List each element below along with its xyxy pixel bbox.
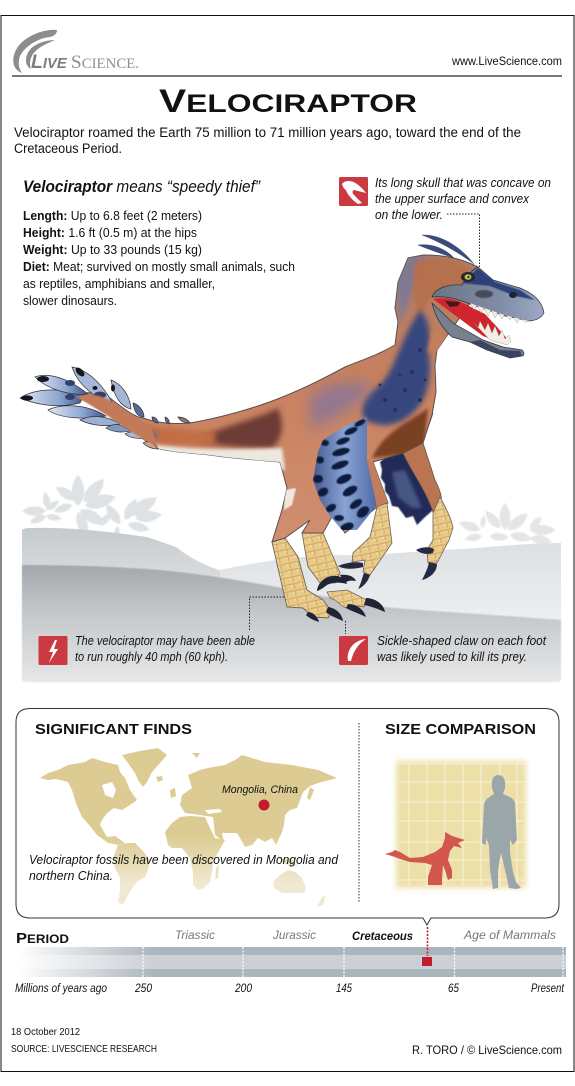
- hip highlight: [284, 488, 296, 510]
- fact list: Weight: Up to 33 pounds (15 kg): [23, 243, 202, 257]
- body shading: [120, 255, 472, 510]
- skull callout text: the upper surface and convex: [375, 192, 530, 206]
- fact list: Length: Up to 6.8 feet (2 meters): [23, 209, 202, 223]
- skull leader line: [447, 214, 480, 268]
- left bushes: [22, 475, 163, 541]
- eye: [461, 272, 475, 282]
- intro text: Cretaceous Period.: [14, 141, 122, 156]
- header rule: [12, 75, 562, 77]
- title: VELOCIRAPTOR: [159, 83, 417, 119]
- fact list: slower dinosaurs.: [23, 294, 117, 308]
- tail root: [76, 395, 158, 447]
- speed callout text: The velociraptor may have been able: [75, 634, 255, 648]
- far foot: [327, 590, 367, 608]
- velociraptor illustration: [20, 235, 544, 622]
- lower teeth: [473, 321, 511, 345]
- axis labels: 200: [234, 983, 253, 995]
- speed leader line: [250, 597, 284, 630]
- era labels: Jurassic: [272, 928, 316, 942]
- foot claws: [306, 575, 385, 622]
- logo wordmark: LIVE SCIENCE.: [31, 52, 139, 73]
- icon: claw: [339, 636, 368, 665]
- period timeline: [15, 927, 566, 995]
- neck and shoulder blue: [362, 310, 430, 425]
- skull shading: [462, 268, 535, 300]
- far wing: [380, 448, 433, 525]
- tail underside: [150, 444, 285, 470]
- fact list: Height: 1.6 ft (0.5 m) at the hips: [23, 226, 197, 240]
- skull callout text: Its long skull that was concave on: [375, 176, 551, 190]
- far hill right: [220, 543, 561, 640]
- far hand: [427, 497, 453, 563]
- far hill left: [22, 528, 225, 640]
- map label: Mongolia, China: [222, 784, 298, 796]
- claw callout text: Sickle-shaped claw on each foot: [377, 634, 546, 648]
- near upper arm: [367, 460, 388, 507]
- tail feather tips: [21, 366, 115, 401]
- near hill: [22, 565, 561, 682]
- throat orange: [426, 330, 448, 354]
- grid background: [396, 761, 526, 888]
- date: 18 October 2012: [11, 1027, 80, 1038]
- source: SOURCE: LIVESCIENCE RESEARCH: [11, 1044, 157, 1055]
- axis labels: 145: [336, 983, 353, 995]
- fact list: Diet: Meat; survived on mostly small animals, such: [23, 260, 295, 274]
- claw callout text: was likely used to kill its prey.: [377, 650, 527, 664]
- finds caption: Velociraptor fossils have been discovered in Mongolia and: [29, 852, 339, 867]
- finds caption: northern China.: [29, 868, 113, 883]
- upper skull: [432, 267, 544, 321]
- background landscape: [22, 475, 561, 682]
- speed callout text: to run roughly 40 mph (60 kph).: [75, 650, 228, 664]
- speed callout text: [75, 634, 255, 664]
- body: [75, 255, 478, 542]
- tail orange: [150, 424, 218, 446]
- head orange: [413, 259, 472, 315]
- claw leader line: [344, 621, 346, 634]
- upper teeth: [470, 303, 530, 323]
- tail shadow band: [195, 408, 282, 448]
- map marker: [258, 800, 270, 810]
- divider: [358, 723, 360, 903]
- intro text: Velociraptor roamed the Earth 75 million to 71 million years ago, toward the end of the: [14, 125, 521, 140]
- head crest: [418, 235, 474, 264]
- far arm: [403, 413, 441, 512]
- human silhouette: [482, 775, 521, 889]
- era labels: [175, 928, 556, 943]
- heading: size comparison: SIZE COMPARISON: [385, 721, 536, 738]
- velociraptor time marker: [422, 927, 432, 966]
- era labels: Age of Mammals: [463, 928, 556, 942]
- belly shadow: [372, 408, 428, 458]
- far leg: [302, 533, 340, 583]
- tail feathers: [20, 367, 190, 449]
- size comparison chart: [385, 761, 526, 889]
- map lakes: [102, 782, 222, 814]
- near hand: [352, 503, 392, 575]
- head top fuzz blue: [395, 255, 430, 325]
- icon: logo swoosh: [13, 30, 57, 73]
- axis labels: Millions of years ago: [15, 983, 108, 995]
- website url: www.LiveScience.com: [451, 54, 562, 68]
- axis labels: 65: [448, 983, 460, 995]
- panel: finds and size: [16, 708, 559, 925]
- skull callout text: on the lower.: [375, 208, 443, 222]
- far hand claws: [416, 547, 437, 580]
- mouth: [433, 298, 510, 345]
- skull callout text: [375, 176, 551, 222]
- axis labels: [15, 983, 565, 995]
- finds caption: [29, 852, 339, 883]
- lower jaw: [432, 303, 524, 358]
- near leg: [272, 538, 332, 618]
- axis labels: 250: [134, 983, 153, 995]
- raptor silhouette: [385, 832, 465, 885]
- fact list: [23, 209, 295, 308]
- icon: lightning bolt: [38, 636, 68, 665]
- heading: significant finds: SIGNIFICANT FINDS: [35, 721, 192, 738]
- logo: LiveScience: [13, 30, 139, 73]
- time bar: [20, 946, 566, 978]
- heading: period: PERIOD: [16, 930, 69, 947]
- subheading: meaning: Velociraptor means “speedy thief”: [23, 178, 261, 196]
- fact list: as reptiles, amphibians and smaller,: [23, 277, 215, 291]
- tail root blue: [142, 430, 158, 442]
- near wing: [313, 417, 377, 530]
- world map: [40, 748, 337, 907]
- right bushes: [457, 503, 556, 546]
- intro text: [14, 125, 521, 156]
- era labels: Cretaceous: [352, 929, 413, 943]
- credit: R. TORO / © LiveScience.com: [412, 1043, 562, 1057]
- speech bubble outline: [16, 708, 559, 925]
- claw callout text: [377, 634, 546, 664]
- axis labels: Present: [531, 983, 565, 995]
- icon: skull: [339, 177, 368, 206]
- neck speckles: [378, 348, 426, 412]
- near hand claws: [338, 562, 370, 589]
- era labels: Triassic: [175, 928, 215, 942]
